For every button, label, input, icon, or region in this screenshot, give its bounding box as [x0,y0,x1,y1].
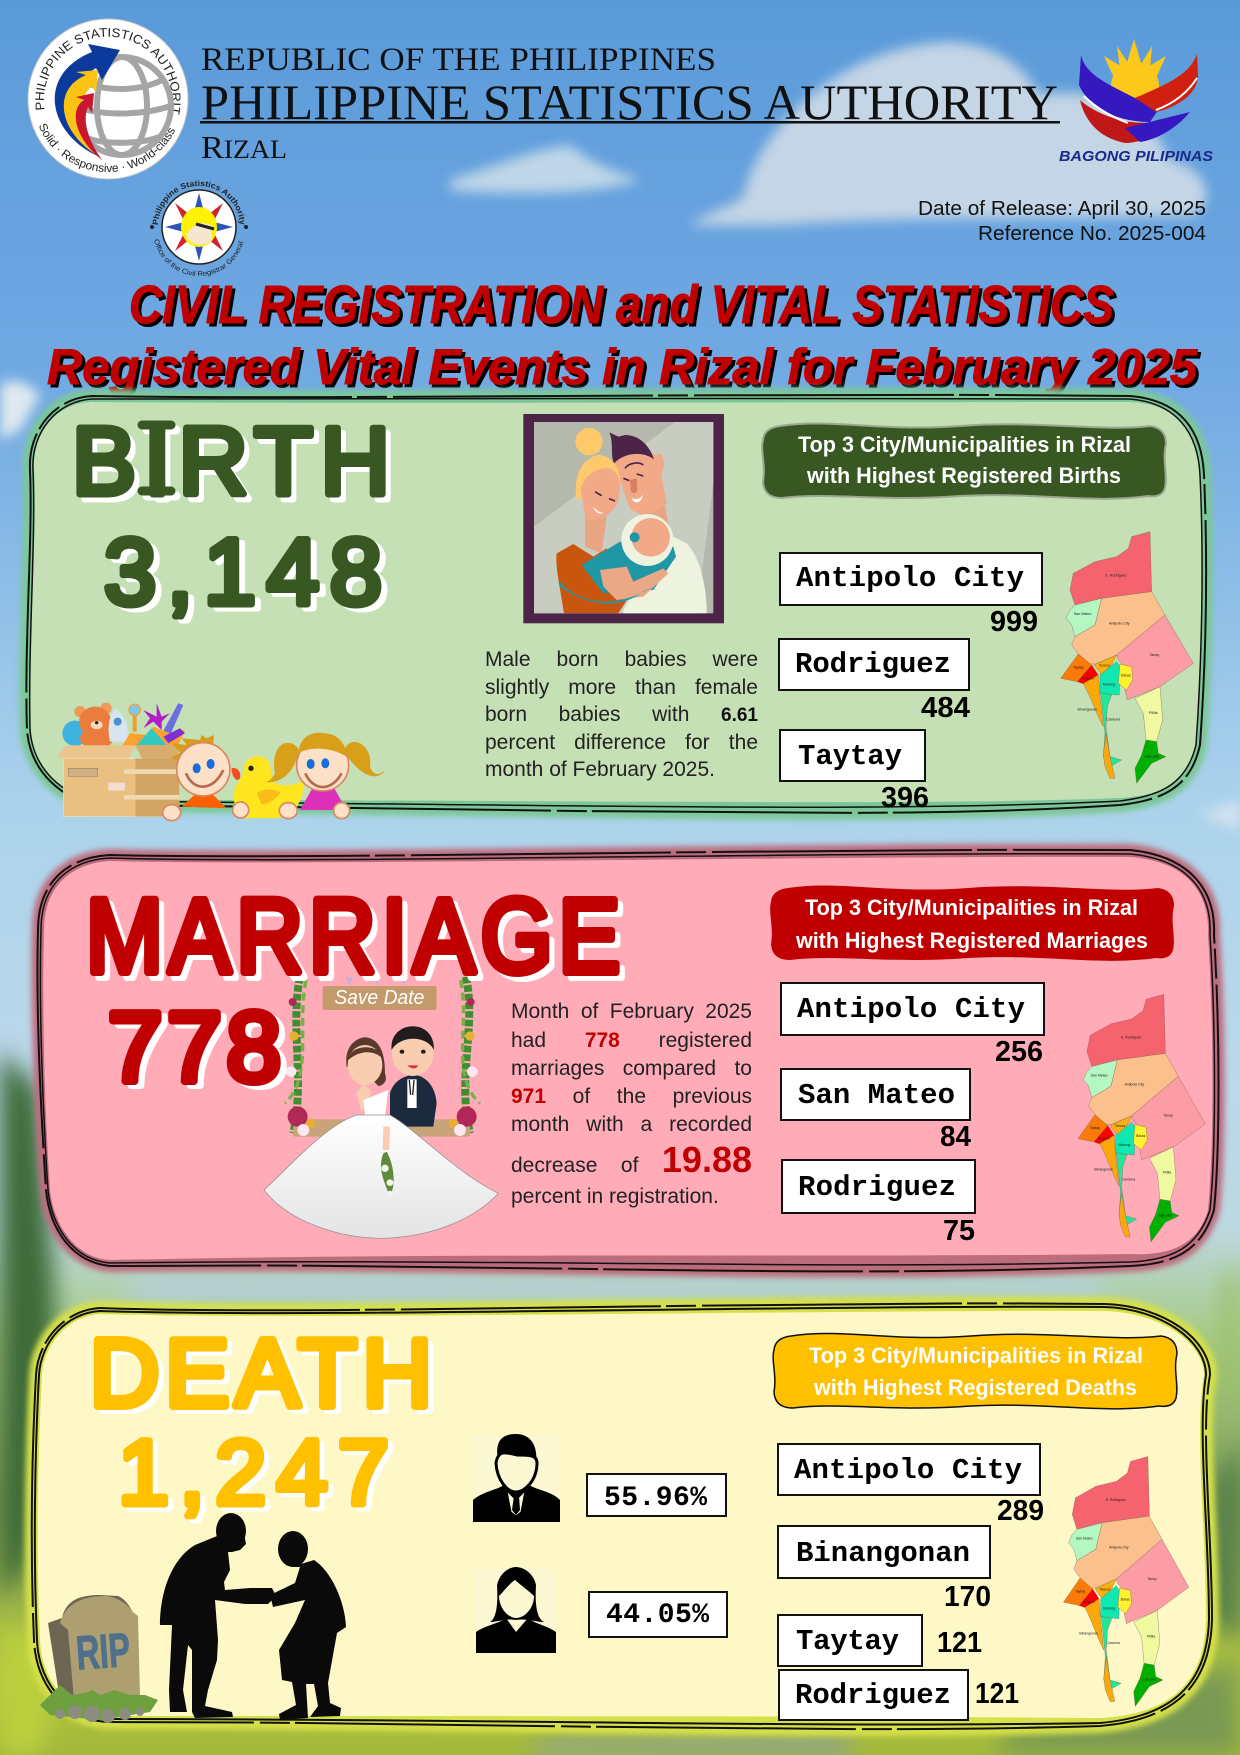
death ranking: Taytay: Taytay [796,1625,899,1658]
map of Rizal (marriage): Jala-Jala [1158,1213,1172,1217]
panel: death [32,1303,1212,1729]
logo: Bagong Pilipinas: BAGONG PILIPINAS [1059,148,1213,165]
header: agency name: PHILIPPINE STATISTICS AUTHORITY [201,74,1058,130]
birth text block: Male born babies were [485,648,758,671]
map of Rizal (birth): E. Rodriguez [1105,574,1127,578]
marriage ranking: Antipolo City: Antipolo City [797,993,1025,1026]
map of Rizal (marriage): Cardona [1122,1177,1135,1181]
death ranking: Rodriguez [779,1670,1019,1720]
map of Rizal (death): Angono [1083,1600,1095,1604]
map of Rizal (birth): Taytay [1073,666,1084,670]
release date and reference number: Reference No. 2025-004 [978,223,1206,245]
death ranking: Binangonan [778,1526,991,1613]
map of Rizal (birth): Teresa [1099,664,1111,668]
map of Rizal (marriage): Antipolo City [1125,1082,1144,1087]
panel: birth [26,395,1206,821]
death ranking: Binangonan: Binangonan [796,1537,970,1570]
birth ranking: Antipolo City [780,553,1042,638]
death heading: DEATH [90,1320,432,1427]
map of Rizal (marriage) [1078,994,1205,1242]
birth text block: percent difference for the [485,730,758,754]
logo: Office of the Civil Registrar General: Office of the Civil Registrar General [154,239,244,276]
marriage callout: with Highest Registered Marriages [795,928,1148,953]
birth ranking: Rodriguez: Rodriguez [795,648,951,681]
marriage ranking: San Mateo [781,1069,971,1153]
map of Rizal (marriage): Binangonan [1094,1167,1113,1171]
birth ranking: Taytay [780,730,929,814]
marriage ranking: Rodriguez: Rodriguez [798,1171,956,1204]
birth ranking: Taytay: Taytay [798,740,902,773]
toys and children illustration [57,703,385,821]
birth text block: month of February 2025. [485,758,715,781]
map of Rizal (death): Pililla [1147,1634,1155,1639]
map of Rizal (marriage): San Mateo [1091,1073,1108,1077]
map of Rizal (marriage): E. Rodriguez [1121,1036,1142,1040]
birth ranking: Antipolo City: 999 [990,606,1038,638]
map of Rizal (marriage): Angono [1098,1137,1110,1141]
family portrait illustration [523,414,724,623]
death ranking: Antipolo City: 289 [997,1495,1044,1527]
release date and reference number: Date of Release: April 30, 2025 [918,198,1206,220]
map of Rizal (death): Antipolo City [1109,1545,1129,1550]
map of Rizal (marriage): Morong [1118,1143,1130,1147]
death ranking: Rodriguez: 121 [975,1678,1019,1710]
map of Rizal (death): San Mateo [1076,1536,1093,1540]
death ranking: Antipolo City [778,1444,1044,1527]
death total: 1,247 [118,1422,389,1524]
marriage text block: marriages compared to [511,1057,752,1080]
logo: Office of the Civil Registrar General [150,180,248,276]
gender share: female: 44.05% [606,1600,709,1631]
marriage callout: Top 3 City/Municipalities in Rizal [805,895,1138,920]
icon: male [473,1434,560,1522]
death callout: Top 3 City/Municipalities in Rizal [809,1343,1143,1368]
map of Rizal (birth): Baras [1121,674,1131,678]
death callout [773,1333,1177,1409]
marriage callout [770,885,1174,961]
wedding couple illustration [264,977,498,1238]
marriage text block [511,998,752,1228]
release date and reference number [918,198,1206,245]
tombstone with RIP: RIP [74,1624,132,1681]
death ranking: Taytay [778,1615,982,1666]
birth ranking: Rodriguez [779,639,970,724]
birth ranking: Rodriguez: 484 [921,692,970,724]
death ranking: Binangonan: 170 [944,1581,991,1613]
death ranking: Rodriguez: Rodriguez [795,1679,951,1712]
map of Rizal (death): Jala-Jala [1142,1678,1156,1682]
map of Rizal (death): Binangonan [1079,1631,1098,1635]
main title: Registered Vital Events in Rizal for February 2025 [47,339,1198,395]
map of Rizal (birth): Cardona [1106,718,1121,722]
map of Rizal (marriage): Tanay [1163,1114,1173,1118]
marriage ranking: San Mateo: 84 [940,1121,971,1153]
marriage text block: Month of February 2025 [511,1000,752,1023]
map of Rizal (marriage): Baras [1136,1134,1146,1138]
birth ranking: Taytay: 396 [881,782,929,814]
marriage ranking: Rodriguez: 75 [943,1215,975,1247]
header: PSA logo: Solid · Responsive · World-class [40,124,175,172]
death ranking: Taytay: 121 [937,1627,982,1659]
marriage heading: MARRIAGE [86,876,620,994]
map of Rizal (death): Taytay [1075,1589,1085,1594]
birth total: 3,148 [104,519,382,624]
marriage total: 778 [108,992,281,1102]
map of Rizal (marriage): Teresa [1115,1124,1125,1128]
marriage text block: percent in registration. [511,1185,719,1208]
map of Rizal (birth): Pililla [1149,711,1159,715]
map of Rizal (death): Tanay [1147,1577,1157,1581]
birth callout: with Highest Registered Births [806,463,1121,488]
map of Rizal (birth): Binangonan [1078,708,1097,712]
map of Rizal (death): Morong [1103,1606,1115,1610]
birth text block: slightly more than female [485,676,758,698]
tombstone with RIP [40,1595,158,1723]
marriage ranking: Rodriguez [782,1160,975,1247]
map of Rizal (death): Cardona [1107,1641,1120,1645]
gender share: male: 55.96% [604,1483,707,1514]
map of Rizal (birth) [1061,532,1193,783]
death callout: with Highest Registered Deaths [813,1375,1137,1400]
map of Rizal (birth): Jala-Jala [1144,754,1160,758]
birth text block: born babies with 6.61 [485,703,758,726]
header: agency name: REPUBLIC OF THE PHILIPPINES [201,42,716,78]
marriage text block: decrease of 19.88 [511,1139,752,1180]
header: agency name [200,42,1060,165]
map of Rizal (death): E. Rodriguez [1106,1498,1126,1502]
header: PSA logo [28,18,188,180]
map of Rizal (birth): Tanay [1149,653,1159,657]
death ranking: Antipolo City: Antipolo City [794,1454,1022,1487]
logo: Bagong Pilipinas [1059,39,1213,165]
birth heading: BIRTH [72,408,390,515]
gender share: male [587,1474,726,1516]
header: agency name: RIZAL [201,129,287,165]
birth callout [762,423,1166,499]
birth text block [485,646,758,796]
main title [47,275,1198,395]
map of Rizal (death): Baras [1121,1597,1130,1602]
map of Rizal (death) [1063,1457,1189,1706]
birth callout: Top 3 City/Municipalities in Rizal [798,432,1131,457]
map of Rizal (birth): Angono [1081,676,1094,680]
map of Rizal (birth): Morong [1103,683,1115,687]
map of Rizal (birth): San Mateo [1074,612,1092,616]
marriage text block: month with a recorded [511,1113,752,1136]
silhouette: elderly couple [160,1513,346,1720]
logo: Office of the Civil Registrar General: Philippine Statistics Authority [152,180,244,225]
marriage ranking: Antipolo City [781,983,1044,1068]
map of Rizal (birth): Antipolo City [1109,621,1130,625]
marriage text block: had 778 registered [511,1029,752,1052]
gender share: female [589,1592,727,1637]
marriage ranking: Antipolo City: 256 [995,1036,1043,1068]
birth ranking: Antipolo City: Antipolo City [796,562,1024,595]
marriage text block: 971 of the previous [511,1085,752,1108]
map of Rizal (death): Teresa [1100,1587,1110,1592]
map of Rizal (marriage): Taytay [1090,1126,1100,1130]
wedding couple illustration: Save Date [334,987,424,1009]
marriage ranking: San Mateo: San Mateo [798,1079,955,1112]
panel: marriage [37,850,1219,1271]
icon: female [476,1567,556,1653]
map of Rizal (marriage): Pililla [1163,1171,1171,1175]
